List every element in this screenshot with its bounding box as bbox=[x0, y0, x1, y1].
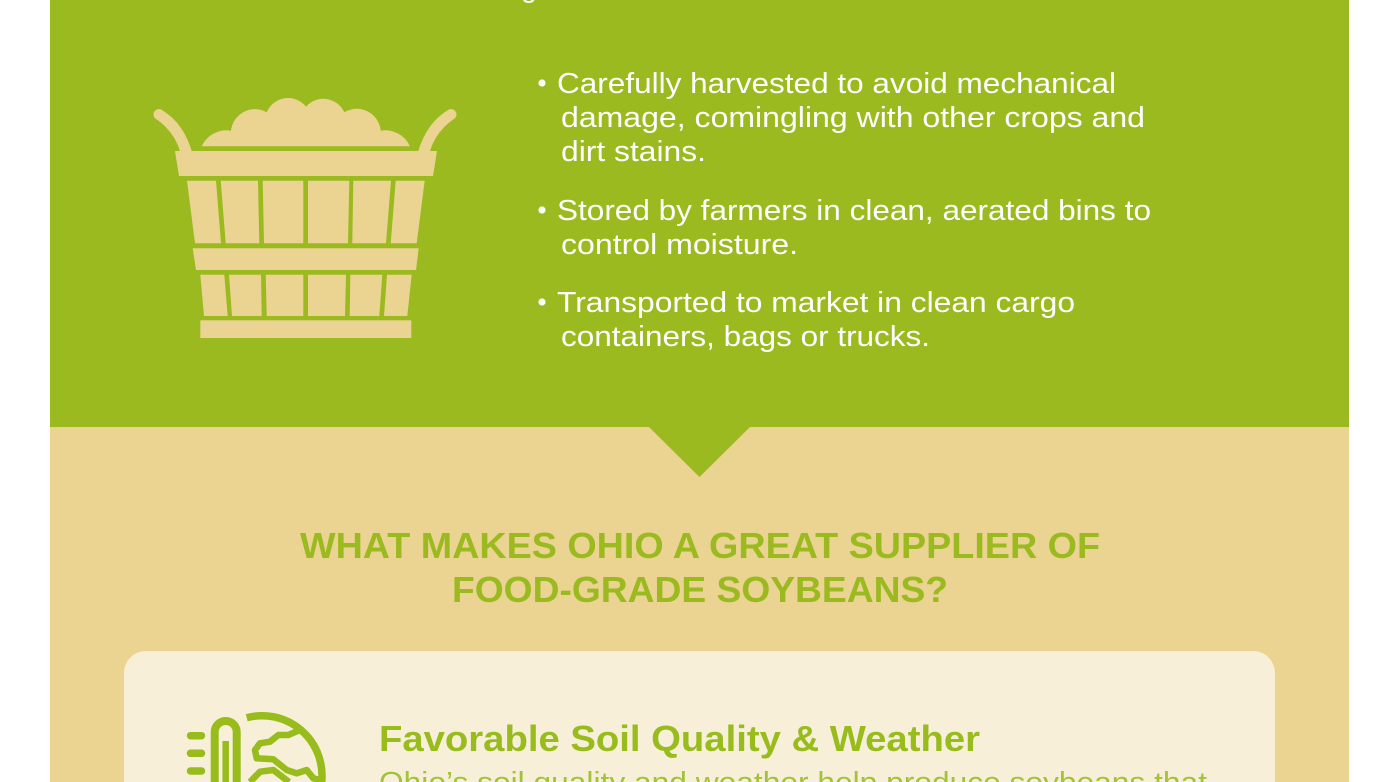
arrow: pointing down from green panel bbox=[649, 427, 750, 477]
bullet list: handling requirements: dirt stains. bbox=[561, 136, 706, 168]
bullet list: handling requirements bbox=[538, 68, 1151, 353]
bullet list: handling requirements: Stored by farmers in clean, aerated bins to bbox=[557, 195, 1151, 227]
bullet list: handling requirements: containers, bags or trucks. bbox=[561, 321, 930, 353]
icon: bushel basket bbox=[154, 98, 456, 338]
card title: Favorable Soil Quality & Weather bbox=[379, 718, 980, 759]
bullet list: handling requirements: Carefully harvested to avoid mechanical bbox=[557, 68, 1116, 100]
bullet list: handling requirements: control moisture. bbox=[561, 229, 798, 261]
bullet list: handling requirements: Transported to market in clean cargo bbox=[557, 287, 1075, 319]
icon: thermometer and globe bbox=[190, 716, 322, 782]
panel: harvest and storage bbox=[50, 0, 1349, 427]
heading: FOOD-GRADE SOYBEANS? bbox=[452, 569, 948, 610]
heading bbox=[300, 525, 1100, 610]
bullet list: handling requirements: damage, comingling with other crops and bbox=[561, 102, 1145, 134]
card: favorable soil quality and weather bbox=[124, 651, 1275, 782]
panel: what makes Ohio a great supplier bbox=[50, 427, 1349, 782]
heading: WHAT MAKES OHIO A GREAT SUPPLIER OF bbox=[300, 525, 1100, 566]
